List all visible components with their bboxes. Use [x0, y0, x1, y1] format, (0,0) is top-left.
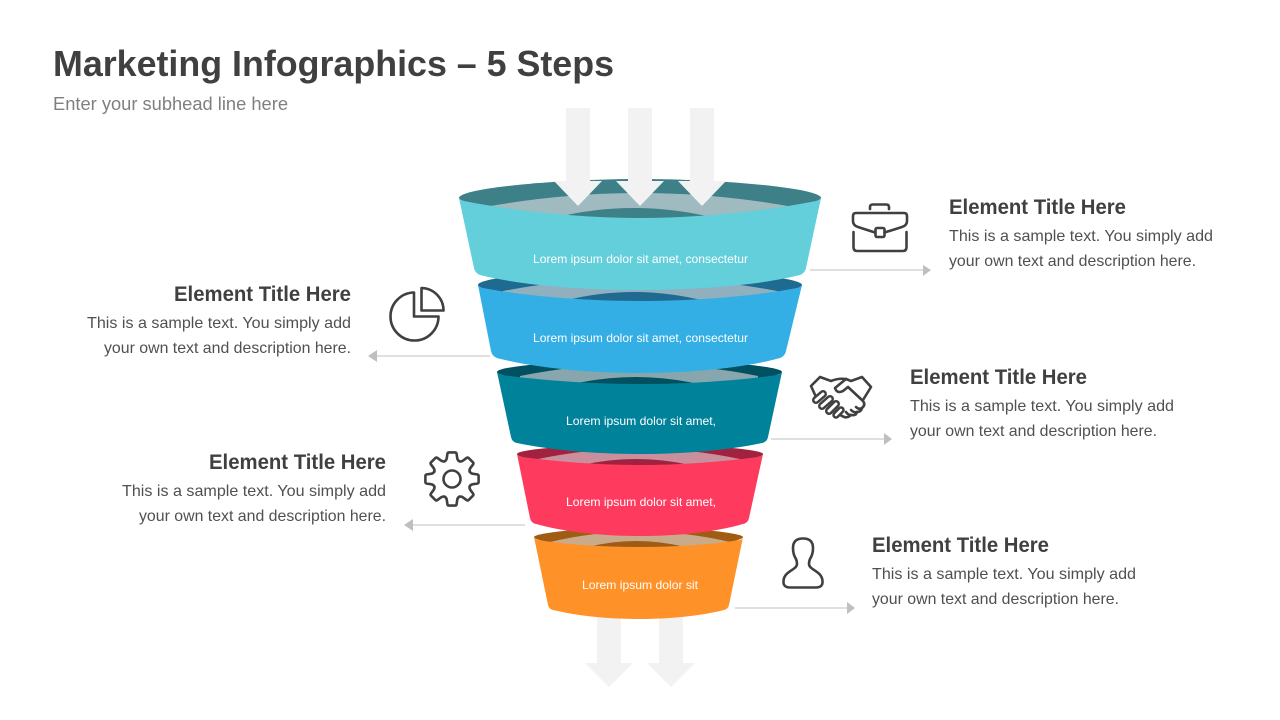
- icon: briefcase: [853, 204, 907, 251]
- step 1 connector arrow: [810, 265, 931, 276]
- step 2 connector arrow: [368, 350, 490, 362]
- text block: step 4: [122, 451, 386, 525]
- text block: step 3: Element Title Here: [910, 366, 1087, 389]
- text block: step 5: your own text and description here.: [872, 591, 1119, 608]
- text block: step 4: This is a sample text. You simply add: [122, 483, 386, 500]
- funnel layer 2: blue: Lorem ipsum dolor sit amet, consectetur: [533, 331, 748, 345]
- funnel layer 5: orange: Lorem ipsum dolor sit: [582, 578, 699, 592]
- text block: step 1: This is a sample text. You simply add: [949, 228, 1213, 245]
- text block: step 2: [87, 283, 351, 357]
- title: Marketing Infographics – 5 Steps: [53, 43, 614, 84]
- icon: person: [783, 538, 823, 588]
- text block: step 1: your own text and description here.: [949, 253, 1196, 270]
- text block: step 5: [872, 534, 1136, 608]
- step 5 connector arrow: [735, 602, 855, 614]
- text block: step 3: your own text and description here.: [910, 423, 1157, 440]
- funnel layer 4: red: [517, 444, 763, 536]
- bottom output arrows: [585, 600, 695, 687]
- icon: handshake: [811, 377, 871, 417]
- text block: step 2: your own text and description here.: [104, 340, 351, 357]
- funnel layer 1: cyan: [459, 179, 821, 290]
- icon: gear: [425, 452, 479, 506]
- text block: step 3: This is a sample text. You simply add: [910, 398, 1174, 415]
- text block: step 1: Element Title Here: [949, 196, 1126, 219]
- funnel layer 3: teal: Lorem ipsum dolor sit amet,: [566, 414, 716, 428]
- text block: step 5: This is a sample text. You simply add: [872, 566, 1136, 583]
- icon: pie chart: [391, 288, 444, 340]
- top input arrows: [554, 108, 726, 206]
- step 4 connector arrow: [404, 519, 525, 531]
- text block: step 4: Element Title Here: [209, 451, 386, 474]
- text block: step 2: Element Title Here: [174, 283, 351, 306]
- text block: step 4: your own text and description here.: [139, 508, 386, 525]
- funnel layer 5: orange: [534, 527, 743, 619]
- funnel layer 4: red: Lorem ipsum dolor sit amet,: [566, 495, 716, 509]
- text block: step 3: [910, 366, 1174, 440]
- text block: step 1: [949, 196, 1213, 270]
- funnel layer 3: teal: [497, 360, 782, 454]
- text block: step 5: Element Title Here: [872, 534, 1049, 557]
- text block: step 2: This is a sample text. You simply add: [87, 315, 351, 332]
- funnel layer 1: cyan: Lorem ipsum dolor sit amet, consectetur: [533, 252, 748, 266]
- funnel layer 2: blue: [478, 270, 802, 373]
- subhead: Enter your subhead line here: [53, 94, 288, 114]
- step 3 connector arrow: [771, 433, 892, 445]
